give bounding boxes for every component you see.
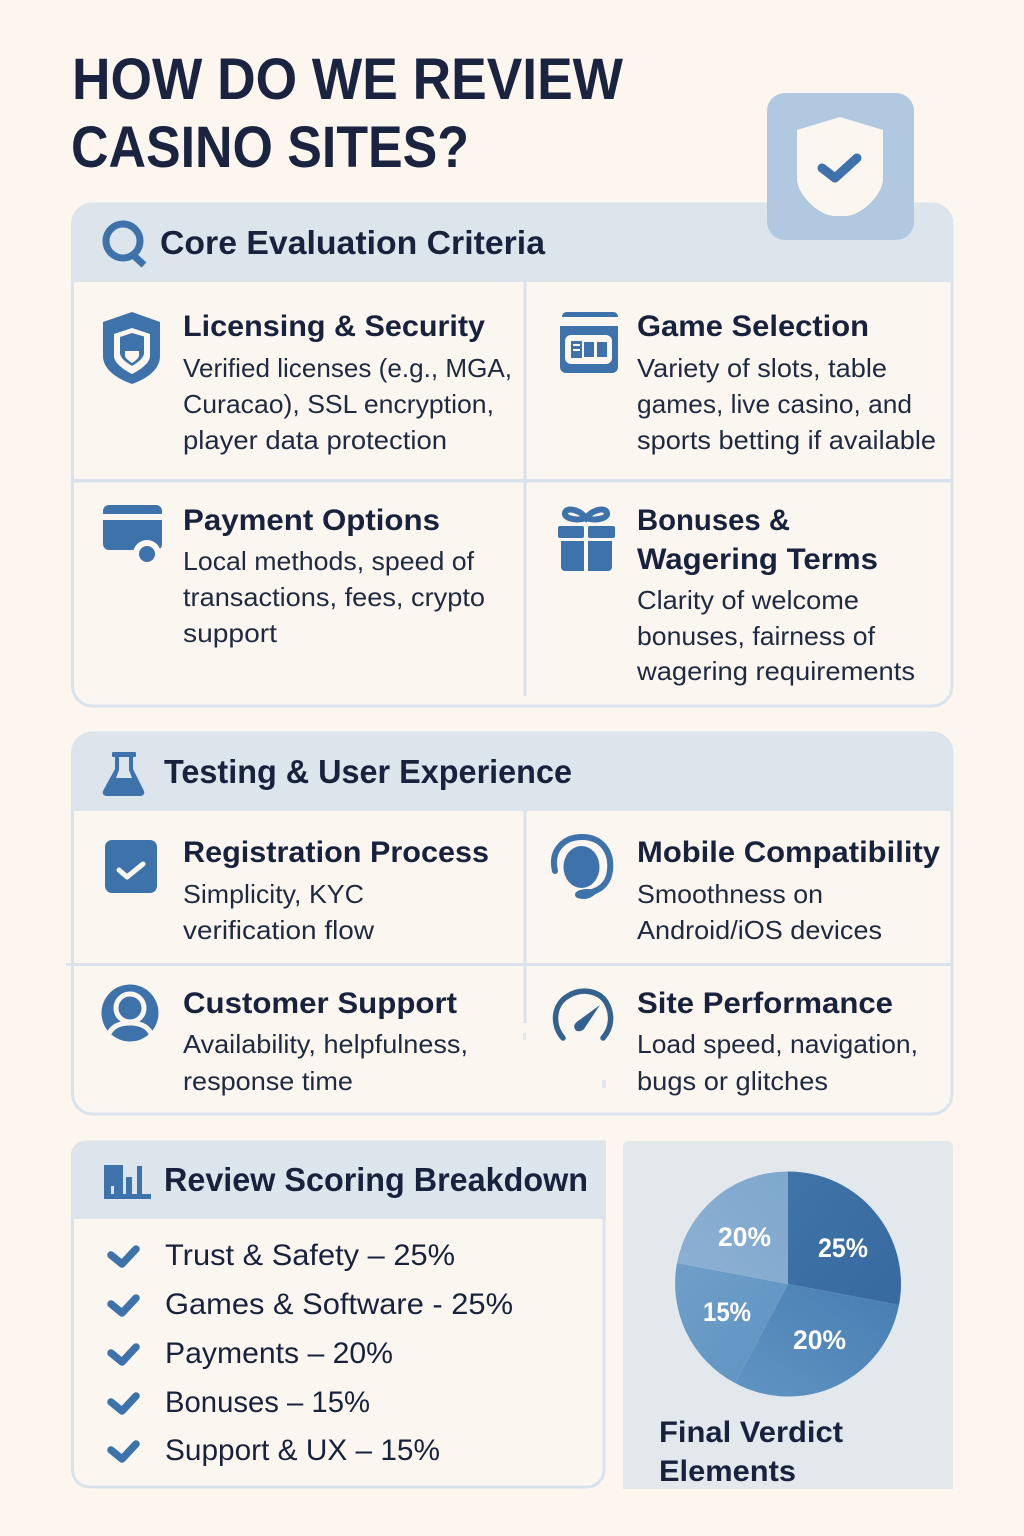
pie chart: 20%	[793, 1325, 846, 1355]
item: site performance: Site Performance	[637, 987, 893, 1020]
item: bonuses and wagering terms: wagering requirements	[636, 656, 915, 686]
item: payment options: transactions, fees, crypto	[183, 582, 485, 612]
item: payment options: Payment Options	[183, 504, 440, 537]
heading: review scoring breakdown: Review Scoring Breakdown	[164, 1161, 588, 1198]
icon: shield badge	[767, 93, 914, 240]
heading: final verdict elements	[659, 1416, 843, 1488]
checklist: scoring items	[111, 1239, 513, 1467]
item: mobile compatibility: Android/iOS devices	[637, 915, 882, 945]
checklist: scoring items: Payments – 20%	[165, 1337, 393, 1370]
item: registration process: Simplicity, KYC	[183, 879, 364, 909]
item: site performance: bugs or glitches	[637, 1066, 828, 1096]
item: registration process: verification flow	[183, 915, 374, 945]
icon: bar chart	[104, 1165, 151, 1199]
item: game selection: sports betting if available	[637, 425, 936, 455]
panel: testing and user experience	[66, 732, 953, 1114]
heading: core evaluation criteria: Core Evaluation Criteria	[160, 224, 546, 261]
title: HOW DO WE REVIEW	[72, 47, 623, 112]
item: bonuses and wagering terms: Bonuses &	[637, 504, 790, 537]
pie chart	[675, 1171, 901, 1397]
item: payment options	[103, 504, 485, 648]
panel: final verdict elements	[623, 1141, 953, 1489]
item: game selection	[560, 310, 936, 455]
item: registration process: Registration Process	[183, 836, 489, 869]
item: payment options: support	[183, 618, 278, 648]
pie chart: 15%	[703, 1297, 751, 1327]
icon: magnifier	[106, 224, 144, 265]
item: bonuses and wagering terms	[558, 504, 915, 686]
item: licensing and security: Verified licenses (e.g., MGA,	[183, 353, 512, 383]
icon: flask	[103, 752, 144, 796]
item: bonuses and wagering terms: Clarity of welcome	[637, 585, 859, 615]
checklist: scoring items: Bonuses – 15%	[165, 1386, 370, 1419]
item: mobile compatibility: Smoothness on	[637, 879, 823, 909]
item: licensing and security: player data protection	[183, 425, 447, 455]
title: CASINO SITES?	[71, 115, 469, 180]
item: registration process	[105, 836, 489, 945]
checklist: scoring items: Support & UX – 15%	[165, 1434, 440, 1467]
heading: final verdict elements: Elements	[659, 1455, 796, 1488]
item: mobile compatibility: Mobile Compatibility	[637, 836, 940, 869]
item: licensing and security: Licensing & Security	[183, 310, 485, 343]
item: site performance	[556, 987, 918, 1096]
title	[71, 47, 623, 180]
heading: final verdict elements: Final Verdict	[659, 1416, 843, 1449]
item: customer support: Customer Support	[183, 987, 457, 1020]
item: game selection: Game Selection	[637, 310, 869, 343]
panel: core evaluation criteria	[71, 203, 953, 706]
item: game selection: games, live casino, and	[637, 389, 912, 419]
item: payment options: Local methods, speed of	[183, 546, 475, 576]
item: mobile compatibility	[554, 836, 940, 945]
checklist: scoring items: Games & Software - 25%	[165, 1288, 513, 1321]
item: customer support: response time	[183, 1066, 353, 1096]
item: game selection: Variety of slots, table	[637, 353, 887, 383]
item: licensing and security: Curacao), SSL encryption,	[183, 389, 494, 419]
panel: review scoring breakdown	[71, 1141, 606, 1487]
item: customer support: Availability, helpfulness,	[183, 1029, 468, 1059]
pie chart: 20%	[718, 1222, 771, 1252]
item: licensing and security	[103, 310, 512, 455]
pie chart: 25%	[818, 1233, 868, 1263]
heading: testing and user experience: Testing & User Experience	[164, 753, 572, 790]
item: bonuses and wagering terms: bonuses, fairness of	[637, 621, 876, 651]
item: customer support	[102, 984, 468, 1096]
item: site performance: Load speed, navigation,	[637, 1029, 918, 1059]
checklist: scoring items: Trust & Safety – 25%	[165, 1239, 455, 1272]
item: bonuses and wagering terms: Wagering Terms	[637, 543, 878, 576]
